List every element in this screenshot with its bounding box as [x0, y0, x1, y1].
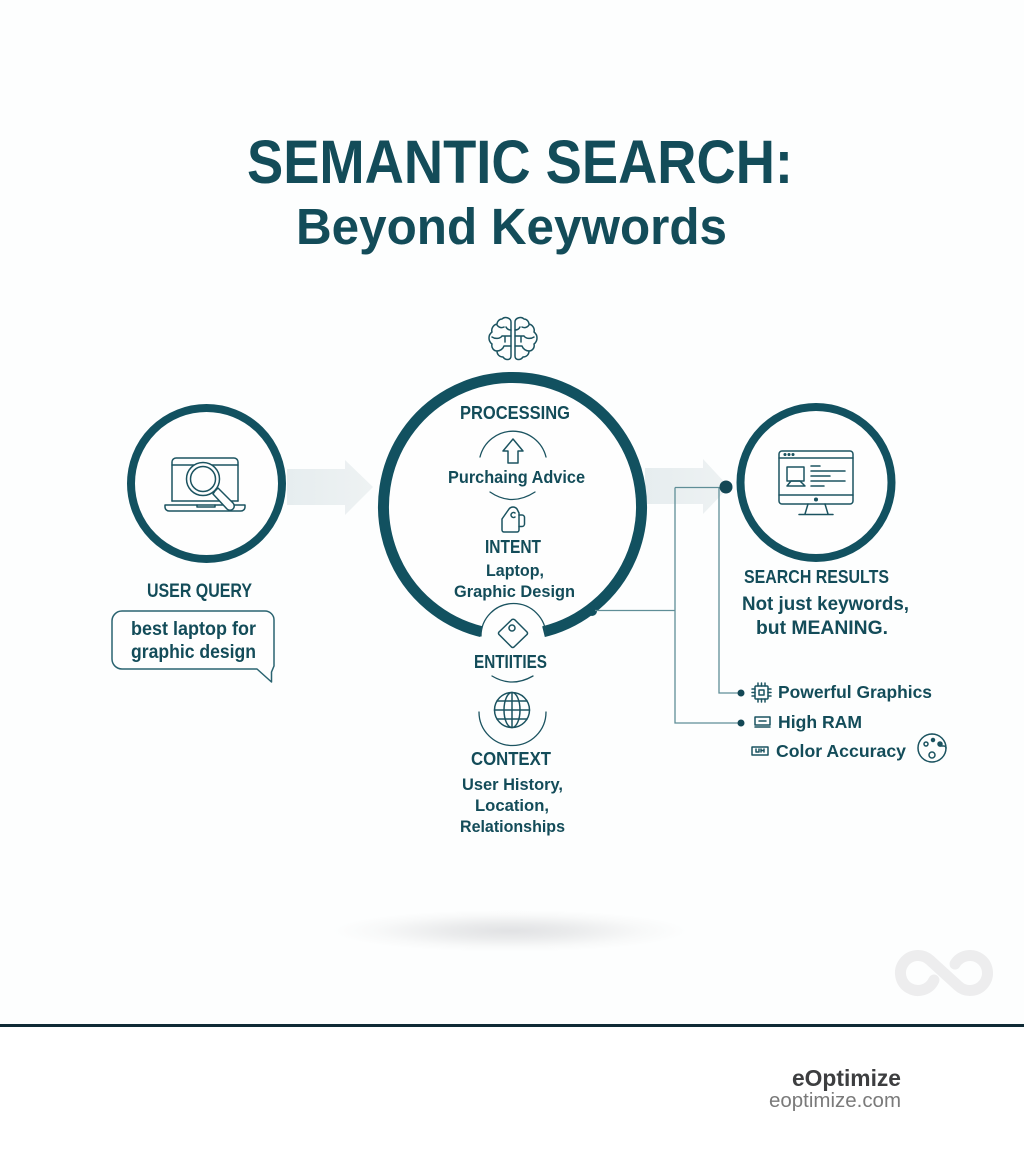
panel: search results	[740, 407, 909, 639]
title: SEMANTIC SEARCH:	[247, 128, 793, 196]
intent heading: INTENT	[485, 536, 542, 557]
icon: palette	[918, 734, 946, 762]
icon: tag mug	[502, 507, 524, 532]
processing heading: PROCESSING	[460, 402, 570, 423]
entities dome and tag icon	[481, 604, 546, 647]
search results label: SEARCH RESULTS	[744, 567, 889, 587]
footer brand: eOptimize	[792, 1065, 901, 1091]
arrow: processing to results	[645, 459, 729, 514]
speech bubble	[112, 611, 274, 682]
search results tagline	[742, 594, 909, 639]
intent text: Laptop,	[486, 561, 544, 580]
speech bubble: best laptop for	[131, 618, 256, 640]
title	[247, 128, 793, 255]
central ring with gap	[384, 377, 641, 632]
feature: powerful graphics: Powerful Graphics	[778, 682, 932, 702]
panel: user query	[112, 408, 282, 682]
title: Beyond Keywords	[296, 198, 727, 255]
user query label: USER QUERY	[147, 581, 252, 602]
panel: processing	[384, 318, 641, 836]
arrow: query to processing	[287, 460, 373, 515]
context text: User History,	[462, 776, 563, 794]
context arc	[479, 712, 546, 746]
context text: Relationships	[460, 818, 565, 836]
user query ring	[131, 408, 282, 559]
icon: brain	[489, 318, 537, 360]
footer brand: eoptimize.com	[769, 1090, 901, 1112]
context heading: CONTEXT	[471, 748, 552, 769]
icon: globe	[494, 692, 530, 728]
entities arc	[492, 676, 533, 682]
purchasing advice text: Purchaing Advice	[448, 467, 585, 487]
intent text: Graphic Design	[454, 582, 575, 601]
lower arc	[490, 492, 535, 500]
entities heading: ENTIITIES	[474, 652, 547, 672]
footer divider	[0, 1024, 1024, 1027]
search results tagline: but MEANING.	[756, 618, 888, 639]
intent text	[454, 561, 575, 601]
search results tagline: Not just keywords,	[742, 594, 909, 615]
footer brand	[769, 1065, 901, 1112]
icon: up arrow in arc	[480, 431, 546, 463]
feature: high ram: High RAM	[778, 712, 862, 732]
speech bubble: graphic design	[131, 641, 256, 663]
icon: laptop with magnifier	[165, 458, 245, 511]
connector lines	[587, 480, 744, 726]
icon: infinity watermark	[900, 955, 988, 990]
icon: monitor	[779, 451, 853, 514]
search results ring	[740, 407, 892, 558]
context text	[460, 776, 565, 836]
ground shadow	[332, 910, 688, 952]
feature: color accuracy: Color Accuracy	[776, 741, 906, 761]
context text: Location,	[475, 797, 549, 815]
